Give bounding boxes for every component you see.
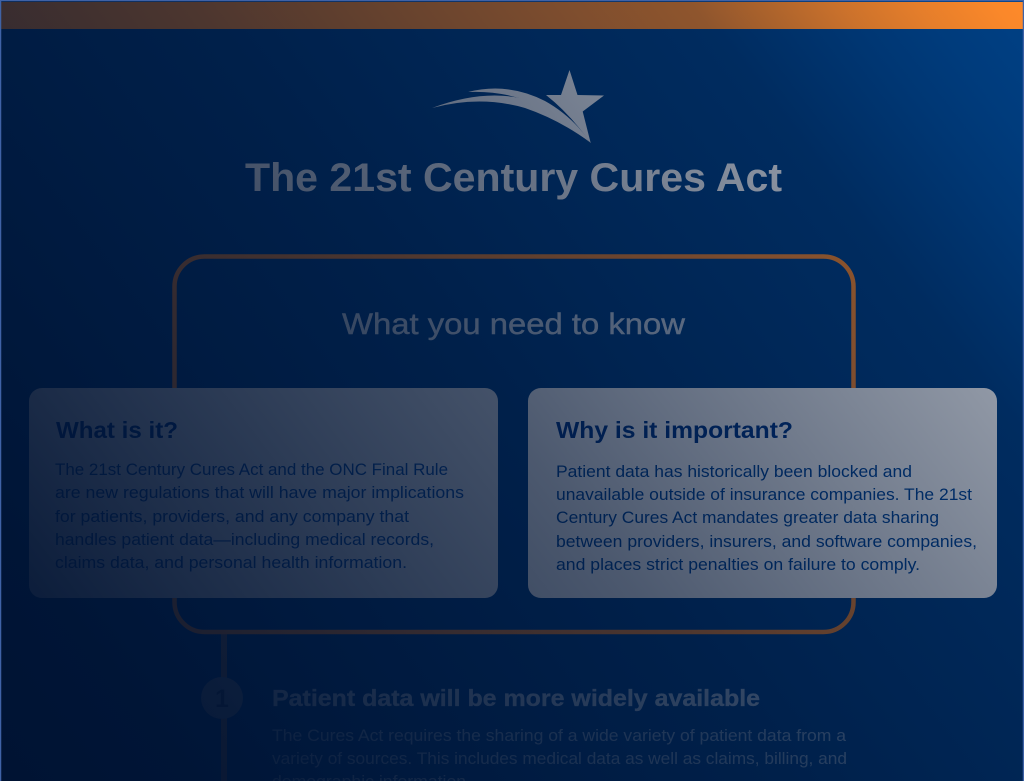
body text: what is it: claims data, and personal health information. [55, 553, 407, 572]
step 1 body text [272, 726, 847, 781]
body text: what is it: The 21st Century Cures Act and the ONC Final Rule [55, 460, 448, 479]
logo: shooting star [432, 70, 604, 143]
rounded orange frame [174, 256, 854, 632]
step 1 number badge [201, 677, 243, 719]
title: The 21st Century Cures Act [245, 156, 782, 200]
body text: what is it [55, 460, 464, 572]
body text: why is it important: unavailable outside of insurance companies. The 21st [556, 485, 972, 504]
panel: why is it important [528, 388, 997, 598]
heading: why is it important: Why is it important? [556, 417, 793, 443]
body text: why is it important: between providers, insurers, and software companies, [556, 532, 977, 551]
timeline connector [221, 634, 227, 781]
step 1 number badge: 1 [215, 685, 229, 713]
subtitle: What you need to know [342, 308, 685, 341]
step 1 body text: The Cures Act requires the sharing of a wide variety of patient data from a [272, 726, 847, 745]
body text: why is it important: Patient data has historically been blocked and [556, 462, 912, 481]
body text: why is it important: and places strict penalties on failure to comply. [556, 555, 920, 574]
heading: what is it: What is it? [56, 417, 178, 443]
step 1 body text: variety of sources. This includes medical data as well as claims, billing, and [272, 749, 847, 768]
body text: why is it important [556, 462, 977, 574]
panel: what is it [29, 388, 498, 598]
body text: what is it: for patients, providers, and any company that [55, 507, 409, 526]
step 1 heading: Patient data will be more widely available [272, 685, 760, 711]
body text: what is it: handles patient data—including medical records, [55, 530, 434, 549]
body text: what is it: are new regulations that will have major implications [55, 483, 464, 502]
body text: why is it important: Century Cures Act mandates greater data sharing [556, 508, 939, 527]
top orange bar [0, 2, 1024, 29]
